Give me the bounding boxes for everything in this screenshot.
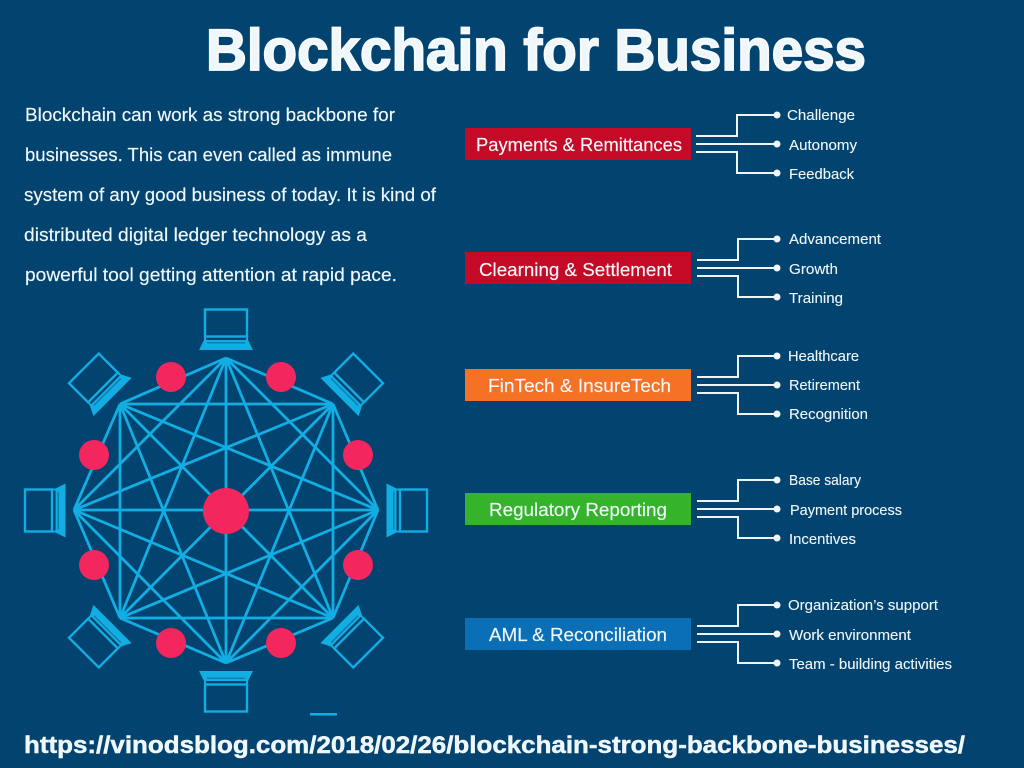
- items: Work environment: [789, 628, 911, 644]
- connector: [697, 352, 780, 418]
- items: [789, 232, 881, 307]
- label box: Clearning & Settlement: [479, 259, 672, 280]
- mesh of connecting lines: [74, 358, 378, 663]
- items: Incentives: [789, 532, 856, 548]
- items: Challenge: [787, 108, 855, 124]
- source url: https://vinodsblog.com/2018/02/26/blockchain-strong-backbone-businesses/: [24, 732, 965, 759]
- label box: [465, 493, 691, 525]
- intro paragraph: businesses. This can even called as immune: [25, 144, 392, 165]
- network diagram: [25, 310, 427, 712]
- label box: FinTech & InsureTech: [488, 375, 671, 396]
- intro paragraph: [24, 104, 437, 285]
- connector: [697, 236, 780, 300]
- label box: [465, 128, 691, 160]
- panel: clearing and settlement: [465, 232, 881, 307]
- panel: payments and remittances: [465, 108, 858, 183]
- items: Autonomy: [789, 138, 858, 154]
- connector: [696, 112, 780, 176]
- items: Payment process: [790, 503, 902, 519]
- laptops ring: [25, 310, 427, 712]
- label box: [465, 369, 691, 401]
- items: Healthcare: [788, 349, 859, 365]
- intro paragraph: distributed digital ledger technology as a: [24, 224, 368, 245]
- items: Team - building activities: [789, 657, 952, 673]
- intro paragraph: system of any good business of today. It is kind of: [24, 184, 437, 205]
- label box: Regulatory Reporting: [489, 499, 667, 520]
- connector: [697, 602, 780, 666]
- items: [787, 108, 858, 183]
- intro paragraph: Blockchain can work as strong backbone for: [25, 104, 395, 125]
- label box: [465, 618, 691, 650]
- items: Training: [789, 291, 843, 307]
- intro paragraph: powerful tool getting attention at rapid pace.: [25, 264, 397, 285]
- label box: Payments & Remittances: [476, 134, 682, 155]
- panel: fintech and insuretech: [465, 349, 868, 423]
- items: [789, 473, 902, 548]
- items: Recognition: [789, 407, 868, 423]
- connector: [697, 476, 780, 542]
- items: [788, 349, 868, 423]
- pink nodes: [79, 362, 373, 658]
- items: Feedback: [789, 167, 855, 183]
- items: Base salary: [789, 473, 862, 489]
- panel: regulatory reporting: [465, 473, 902, 548]
- items: [788, 598, 952, 673]
- title: Blockchain for Business: [206, 18, 866, 83]
- label box: [465, 252, 691, 284]
- items: Retirement: [789, 378, 860, 394]
- items: Growth: [789, 262, 838, 278]
- panel: aml and reconciliation: [465, 598, 952, 673]
- items: Advancement: [789, 232, 881, 248]
- label box: AML & Reconciliation: [489, 624, 667, 645]
- items: Organization’s support: [788, 598, 938, 614]
